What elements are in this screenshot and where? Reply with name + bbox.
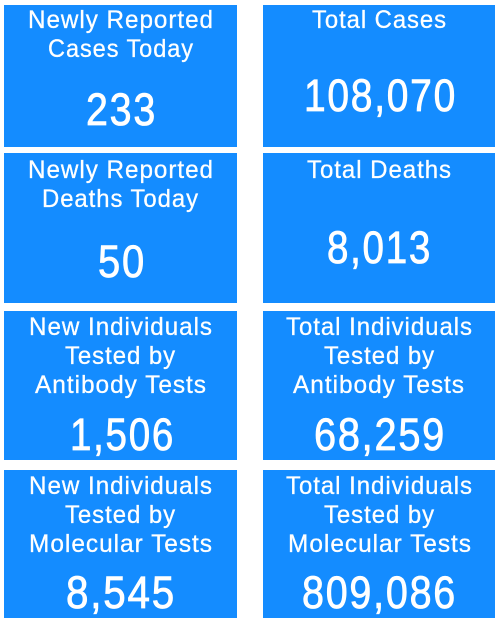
panel: total cases: 108,070 xyxy=(304,70,457,121)
panel: total individuals tested by molecular tests xyxy=(263,470,495,618)
panel: newly reported deaths today: Deaths Today xyxy=(42,185,199,213)
panel: new individuals tested by molecular tests xyxy=(4,470,237,618)
panel: new individuals tested by antibody tests: 1,506 xyxy=(70,409,175,460)
panel: total cases: Total Cases xyxy=(312,6,447,34)
panel: total individuals tested by molecular tests: Molecular Tests xyxy=(288,530,472,558)
panel: newly reported cases today xyxy=(4,5,237,147)
panel: new individuals tested by molecular tests: New Individuals xyxy=(29,472,213,500)
panel: total individuals tested by antibody tests: Tested by xyxy=(324,342,435,370)
panel: total cases xyxy=(263,5,495,147)
panel: total individuals tested by molecular tests: 809,086 xyxy=(302,567,457,618)
panel: new individuals tested by antibody tests: New Individuals xyxy=(29,313,213,341)
panel: newly reported deaths today xyxy=(4,153,237,303)
panel: total individuals tested by antibody tests: Antibody Tests xyxy=(293,371,465,399)
panel: total individuals tested by antibody tests: 68,259 xyxy=(314,409,446,460)
panel: total individuals tested by molecular tests: Tested by xyxy=(324,501,435,529)
panel: newly reported cases today: 233 xyxy=(86,84,157,135)
panel: newly reported deaths today: 50 xyxy=(98,236,146,287)
panel: newly reported deaths today: Newly Reported xyxy=(28,156,214,184)
panel: total individuals tested by antibody tests xyxy=(263,311,495,460)
panel: total deaths: 8,013 xyxy=(327,222,432,273)
panel: new individuals tested by antibody tests: Tested by xyxy=(65,342,176,370)
panel: new individuals tested by molecular tests: Tested by xyxy=(65,501,176,529)
panel: total individuals tested by molecular tests: Total Individuals xyxy=(286,472,473,500)
panel: new individuals tested by antibody tests xyxy=(4,311,237,460)
panel: newly reported cases today: Cases Today xyxy=(48,35,194,63)
panel: new individuals tested by antibody tests: Antibody Tests xyxy=(35,371,207,399)
panel: new individuals tested by molecular tests: Molecular Tests xyxy=(29,530,213,558)
panel: total deaths: Total Deaths xyxy=(307,156,452,184)
panel: total deaths xyxy=(263,153,495,303)
panel: newly reported cases today: Newly Reported xyxy=(28,6,214,34)
panel: total individuals tested by antibody tests: Total Individuals xyxy=(286,313,473,341)
panel: new individuals tested by molecular tests: 8,545 xyxy=(66,567,176,618)
